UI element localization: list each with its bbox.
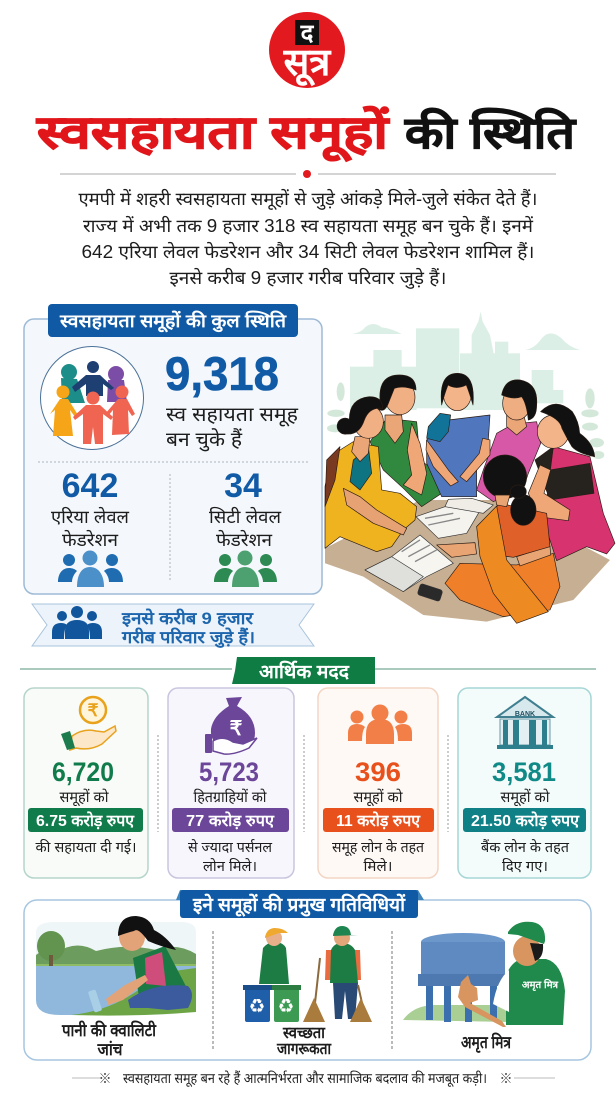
card: 3581: दिए गए। bbox=[502, 858, 548, 875]
icon: rupee hand bbox=[61, 697, 116, 750]
stat: 642: एरिया लेवल bbox=[51, 506, 130, 527]
illustration: women meeting bbox=[325, 312, 615, 623]
woman: green sari bbox=[370, 375, 443, 507]
card: 3581 bbox=[458, 688, 591, 878]
activity labels: जांच bbox=[97, 1040, 124, 1059]
stat: 642 bbox=[51, 467, 130, 587]
card: 3581: 21.50 करोड़ रुपए bbox=[471, 811, 580, 830]
stat: 9318: स्व सहायता समूह bbox=[166, 404, 298, 427]
ribbon callout: गरीब परिवार जुड़े हैं। bbox=[121, 627, 255, 648]
icon: people circle bbox=[40, 346, 144, 450]
panel heading: स्वसहायता समूहों की कुल स्थिति bbox=[59, 310, 287, 333]
footer note: ※ bbox=[98, 1071, 112, 1086]
icon: bank: BANK bbox=[515, 711, 535, 718]
icon: blue people bbox=[58, 550, 123, 587]
icon: families bbox=[52, 606, 102, 639]
activity labels bbox=[61, 1020, 511, 1059]
logo: द bbox=[300, 20, 315, 47]
intro paragraph: एमपी में शहरी स्वसहायता समूहों से जुड़े आंकड़े मिले-जुले संकेत देते हैं। bbox=[78, 188, 538, 210]
title: की स्थिति bbox=[404, 107, 577, 158]
logo bbox=[269, 12, 345, 88]
card: 6720 bbox=[24, 688, 148, 878]
icon: green people bbox=[214, 550, 277, 587]
card: 5723: 77 करोड़ रुपए bbox=[186, 811, 275, 830]
stat: 9318: बन चुके हैं bbox=[166, 428, 242, 452]
stat: 34 bbox=[209, 467, 282, 587]
card: 5723 bbox=[168, 688, 294, 878]
card: 5723: लोन मिले। bbox=[203, 858, 257, 875]
card: 6720: की सहायता दी गई। bbox=[36, 839, 136, 856]
illustration: water testing bbox=[36, 916, 196, 1016]
stat: 9318 bbox=[165, 347, 298, 452]
illustration: Amrit Mitra: अमृत मित्र bbox=[522, 978, 559, 991]
card: 3581: समूहों को bbox=[500, 788, 551, 807]
card: 3581: 3,581 bbox=[492, 757, 556, 787]
stat: 9318: 9,318 bbox=[165, 347, 279, 400]
title bbox=[36, 106, 577, 162]
footer note: ※ bbox=[499, 1071, 513, 1086]
intro paragraph: 642 एरिया लेवल फेडरेशन और 34 सिटी लेवल फेडरेशन शामिल हैं। bbox=[82, 241, 534, 262]
intro paragraph: राज्य में अभी तक 9 हजार 318 स्व सहायता समूह बन चुके हैं। इनमें bbox=[83, 215, 534, 237]
illustration: sanitation workers: ♻ bbox=[279, 998, 293, 1014]
activity labels: स्वच्छता bbox=[282, 1025, 326, 1042]
panel heading: इने समूहों की प्रमुख गतिविधियों bbox=[192, 893, 406, 917]
card: 6720: 6.75 करोड़ रुपए bbox=[36, 811, 135, 830]
icon: money bag: ₹ bbox=[230, 718, 243, 740]
title: स्वसहायता समूहों bbox=[36, 106, 391, 162]
ribbon callout: इनसे करीब 9 हजार bbox=[121, 608, 254, 628]
illustration: sanitation workers bbox=[243, 926, 372, 1022]
activity labels: जागरूकता bbox=[276, 1041, 332, 1058]
card: 5723: से ज्यादा पर्सनल bbox=[188, 839, 273, 856]
panel heading bbox=[48, 304, 298, 337]
books bbox=[365, 498, 493, 602]
icon: money bag bbox=[205, 697, 257, 754]
card: 396: समूहों को bbox=[354, 788, 404, 807]
stat: 642: फेडरेशन bbox=[62, 529, 119, 550]
woman: pink sari bbox=[477, 380, 541, 502]
card: 6720: समूहों को bbox=[60, 788, 110, 807]
ribbon callout bbox=[32, 604, 314, 648]
section heading: financial aid: आर्थिक मदद bbox=[259, 660, 350, 683]
stat: 642: 642 bbox=[62, 467, 118, 505]
card: 3581: बैंक लोन के तहत bbox=[481, 839, 570, 856]
card: 6720: 6,720 bbox=[52, 757, 114, 787]
stat: 34: फेडरेशन bbox=[216, 529, 273, 550]
stat: 34: 34 bbox=[224, 467, 262, 505]
section heading: financial aid bbox=[20, 657, 596, 684]
intro paragraph bbox=[78, 188, 538, 289]
floor mat bbox=[325, 500, 610, 622]
intro paragraph: इनसे करीब 9 हजार गरीब परिवार जुड़े हैं। bbox=[170, 267, 446, 289]
woman: orange sari bbox=[437, 455, 560, 623]
activity labels: अमृत मित्र bbox=[461, 1032, 511, 1053]
card: 396: 396 bbox=[355, 757, 401, 787]
woman: blue sari bbox=[426, 373, 490, 497]
icon: rupee hand: ₹ bbox=[88, 701, 99, 720]
card: 396: मिले। bbox=[364, 858, 392, 875]
card: 396: 11 करोड़ रुपए bbox=[336, 811, 421, 830]
divider bbox=[60, 170, 556, 178]
icon: bank bbox=[497, 697, 553, 749]
woman: red sari bbox=[528, 404, 615, 561]
activity labels: पानी की क्वालिटी bbox=[61, 1020, 157, 1040]
panel heading bbox=[176, 890, 424, 918]
footer note: स्वसहायता समूह बन रहे हैं आत्मनिर्भरता और सामाजिक बदलाव की मजबूत कड़ी। bbox=[123, 1070, 487, 1087]
panel: activities bbox=[24, 890, 591, 1060]
illustration: Amrit Mitra bbox=[403, 922, 565, 1027]
card: 5723: हितग्राहियों को bbox=[194, 788, 268, 806]
card: 396: समूह लोन के तहत bbox=[332, 839, 425, 856]
icon: people orange bbox=[348, 704, 412, 744]
city backdrop bbox=[350, 312, 580, 410]
card: 5723: 5,723 bbox=[199, 757, 259, 787]
panel: overall status bbox=[24, 304, 322, 594]
logo: सूत्र bbox=[283, 42, 332, 87]
woman: yellow sari bbox=[325, 397, 417, 552]
stat: 34: सिटी लेवल bbox=[209, 506, 282, 527]
card: 396 bbox=[318, 688, 438, 878]
illustration: sanitation workers: ♻ bbox=[250, 998, 264, 1014]
